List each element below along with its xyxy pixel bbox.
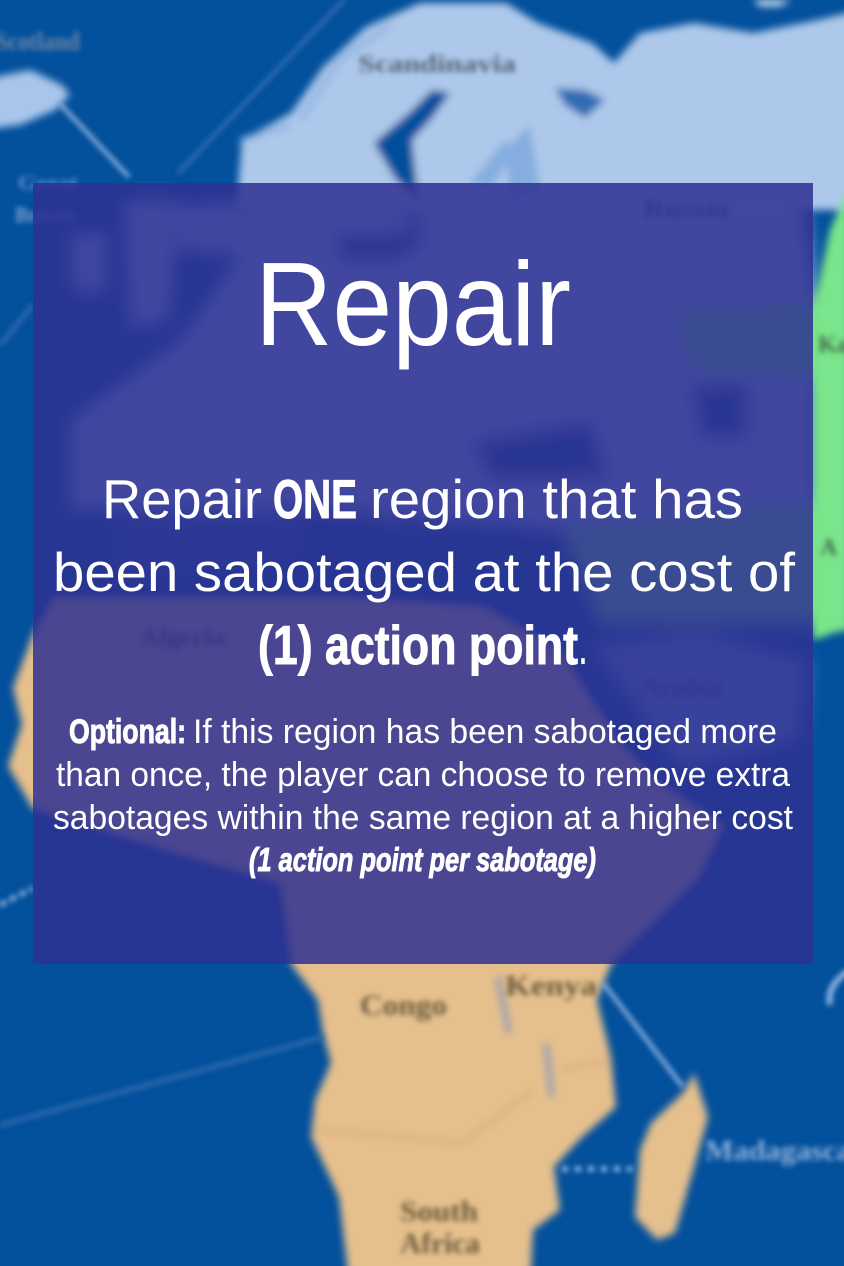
blurred map labels: Great <box>18 170 79 195</box>
blurred map labels: Arabia <box>640 675 722 701</box>
Arabia <box>590 630 807 770</box>
blurred map labels: Congo <box>360 989 447 1022</box>
main text block: . <box>578 614 588 676</box>
blurred map labels: A <box>820 535 838 561</box>
main text block: Repair <box>102 468 262 530</box>
optional note: sabotages within the same region at a higher cost <box>53 799 794 837</box>
rivers and lakes <box>318 1060 608 1143</box>
main text block: ONE <box>273 468 357 530</box>
Iceland <box>0 70 70 130</box>
Africa <box>8 597 724 1266</box>
blurred map labels: South <box>400 1195 478 1228</box>
blurred map labels: Africa <box>400 1227 480 1260</box>
optional note <box>53 713 794 878</box>
Europe under panel <box>70 185 815 600</box>
green territory <box>813 185 844 640</box>
Scandinavia and Russia <box>237 3 844 210</box>
Madagascar <box>635 1073 708 1240</box>
blurred map labels: Scandinavia <box>358 51 517 78</box>
title: Repair <box>255 238 571 371</box>
main text block: been sabotaged at the cost of <box>53 541 796 603</box>
main text block: region that has <box>370 468 743 530</box>
blurred map labels: Britain <box>15 202 75 227</box>
blurred map labels: Kenya <box>505 971 597 1002</box>
main text block: (1) action point <box>258 614 578 676</box>
optional note: than once, the player can choose to remove extra <box>56 756 790 794</box>
green under panel <box>560 300 830 625</box>
translucent panel <box>33 183 813 964</box>
optional note: Optional: <box>69 713 186 751</box>
optional note: (1 action point per sabotage) <box>249 841 596 878</box>
blurred map labels: Russia <box>643 197 729 223</box>
optional note: If this region has been sabotaged more <box>193 713 777 751</box>
ice <box>753 0 791 6</box>
main text block <box>53 468 796 676</box>
blurred map labels: Algeria <box>140 625 225 651</box>
